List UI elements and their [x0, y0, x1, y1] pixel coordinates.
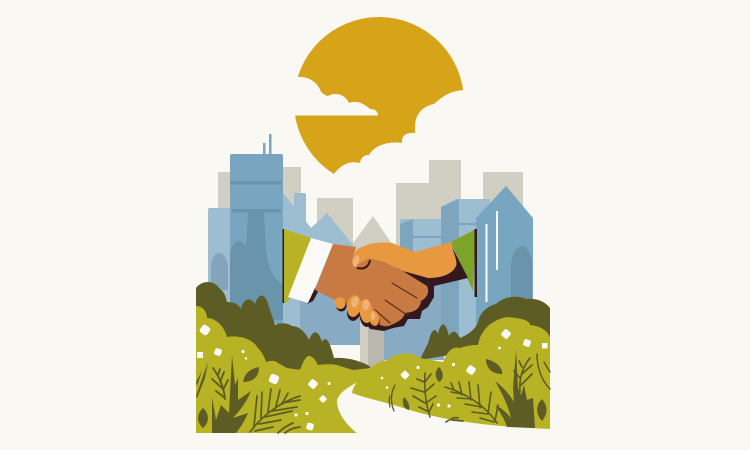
white flowers	[197, 324, 548, 431]
skyline: grey background buildings	[218, 160, 523, 370]
thumb crease	[357, 260, 370, 269]
left bush: light green	[196, 306, 371, 433]
left foliage fern and wheat	[212, 368, 300, 433]
left sleeve and cuff	[282, 229, 333, 304]
thumb highlight	[352, 254, 360, 268]
fingertips	[333, 294, 381, 330]
left bushes: dark	[196, 282, 371, 375]
sun with clouds	[285, 17, 470, 195]
right sleeve	[451, 229, 477, 297]
skyline: right blue buildings	[384, 186, 533, 360]
handshake shadow	[350, 243, 468, 331]
left foliage grasses	[196, 355, 259, 433]
skyline: left blue buildings	[208, 134, 360, 345]
right foliage ferns	[389, 354, 550, 423]
right bush: light green	[352, 317, 550, 429]
right bushes: dark	[420, 297, 550, 360]
right foliage grasses and leaves	[403, 350, 547, 428]
right hand: orange	[352, 242, 457, 278]
finger creases	[375, 283, 417, 323]
left hand: brown	[315, 244, 428, 326]
